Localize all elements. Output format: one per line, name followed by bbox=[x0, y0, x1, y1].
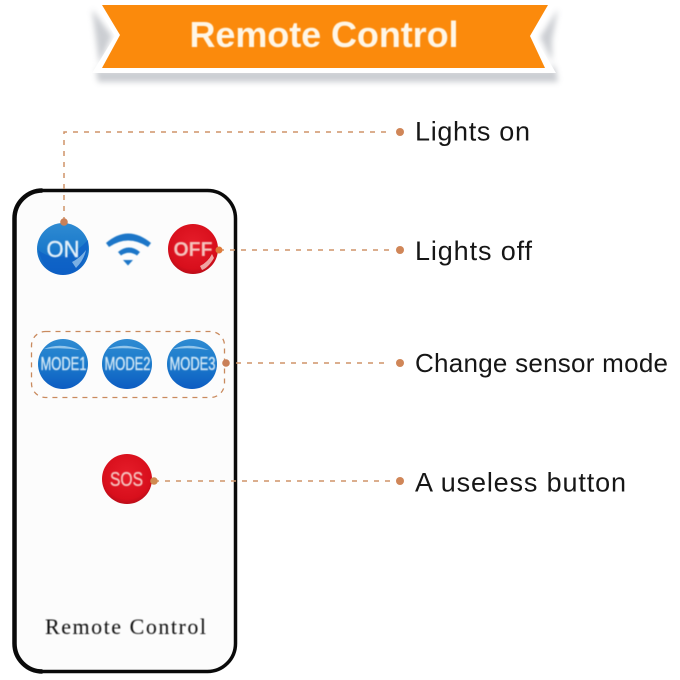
button: SOS bbox=[102, 454, 152, 504]
title text: Remote Control bbox=[190, 14, 458, 55]
button: MODE1: MODE1 bbox=[40, 354, 86, 374]
title banner bbox=[92, 1, 558, 82]
button: MODE3 bbox=[167, 339, 217, 389]
button: MODE1 bbox=[38, 339, 88, 389]
icon: wifi signal bbox=[106, 234, 151, 266]
label: lights off: Lights off bbox=[415, 236, 532, 266]
button: ON bbox=[37, 223, 89, 275]
button: ON: ON bbox=[46, 236, 80, 262]
button: MODE2: MODE2 bbox=[104, 354, 150, 374]
mode button group bbox=[32, 332, 224, 398]
label: lights on: Lights on bbox=[415, 116, 530, 146]
connector: change sensor mode bbox=[222, 359, 404, 367]
connector: useless button bbox=[150, 477, 404, 485]
connector: lights off bbox=[216, 246, 404, 254]
connector: lights on bbox=[60, 128, 404, 226]
label: change sensor mode: Change sensor mode bbox=[415, 348, 668, 378]
remote control body bbox=[14, 190, 236, 672]
dashed mode outline bbox=[32, 332, 224, 398]
button: MODE2 bbox=[102, 339, 152, 389]
button: OFF bbox=[168, 224, 218, 274]
remote caption: Remote Control bbox=[45, 614, 206, 639]
button: OFF: OFF bbox=[174, 239, 212, 261]
button: SOS: SOS bbox=[110, 469, 143, 491]
button: MODE3: MODE3 bbox=[170, 354, 216, 374]
label: a useless button: A useless button bbox=[415, 468, 626, 498]
